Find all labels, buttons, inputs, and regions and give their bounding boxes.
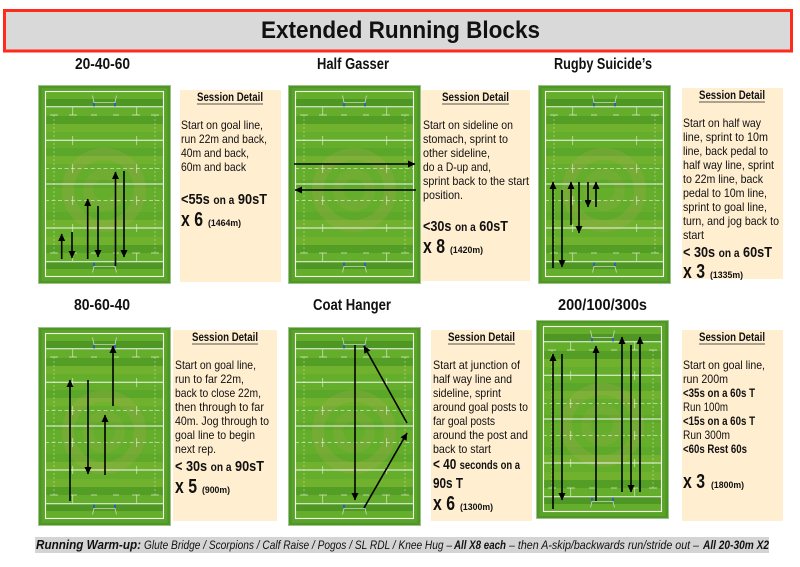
session detail card: sideline, sprint bbox=[433, 386, 502, 400]
footer: running warm-up: All X8 each bbox=[453, 538, 506, 552]
session detail card: (1335m) bbox=[710, 270, 743, 280]
session detail card: back to close 22m, bbox=[175, 386, 261, 400]
session detail card bbox=[421, 90, 530, 281]
session detail card: (900m) bbox=[202, 485, 230, 495]
session detail card: half way line, sprint bbox=[683, 158, 775, 172]
title banner bbox=[4, 10, 792, 51]
session detail card: < 30s on a 90sT bbox=[175, 458, 264, 475]
pitch diagram with arrows bbox=[38, 327, 171, 526]
session detail card bbox=[682, 88, 783, 283]
session detail card: (1420m) bbox=[450, 245, 483, 255]
session detail card: Session Detail bbox=[442, 90, 509, 104]
session detail card: Run 300m bbox=[683, 428, 730, 442]
session detail card: x 8 bbox=[423, 236, 445, 258]
session detail card: Run 100m bbox=[683, 400, 728, 414]
session detail card bbox=[180, 90, 281, 282]
session detail card: Session Detail bbox=[448, 330, 515, 344]
session detail card: then through to far bbox=[175, 400, 264, 414]
session detail card: stomach, sprint to bbox=[423, 132, 508, 146]
session detail card: Start on half way bbox=[683, 116, 761, 130]
panel: 80-60-40 bbox=[38, 297, 277, 526]
session detail card: around the post and bbox=[433, 428, 528, 442]
session detail card: other sideline, bbox=[423, 146, 490, 160]
session detail card: run 22m and back, bbox=[181, 132, 267, 146]
session detail card: <15s on a 60s T bbox=[683, 414, 756, 428]
panel: 20-40-60 bbox=[38, 56, 281, 284]
session detail card: line, sprint to 10m bbox=[683, 130, 768, 144]
session detail card: x 6 bbox=[433, 493, 455, 515]
session detail card: sprint to goal line, bbox=[683, 200, 767, 214]
footer: running warm-up: Glute Bridge / Scorpions / Calf Raise / Pogos / SL RDL / Knee Hug – bbox=[144, 538, 452, 552]
session detail card: 60m and back bbox=[181, 160, 247, 174]
heading: Half Gasser bbox=[317, 56, 389, 73]
session detail card: <30s on a 60sT bbox=[423, 218, 508, 235]
session detail card: <35s on a 60s T bbox=[683, 386, 756, 400]
panel: Rugby Suicide's bbox=[538, 56, 783, 284]
session detail card: Session Detail bbox=[192, 330, 258, 344]
session detail card: far goal posts bbox=[433, 414, 495, 428]
session detail card: < 30s on a 60sT bbox=[683, 244, 772, 261]
title banner: Extended Running Blocks bbox=[261, 17, 540, 44]
session detail card: sprint back to the start bbox=[423, 174, 530, 188]
session detail card: next rep. bbox=[175, 442, 216, 456]
session detail card: half way line and bbox=[433, 372, 512, 386]
pitch diagram with arrows bbox=[288, 85, 421, 284]
pitch diagram with arrows bbox=[538, 85, 671, 284]
session detail card: <55s on a 90sT bbox=[181, 191, 267, 208]
session detail card bbox=[682, 330, 783, 521]
session detail card: back to start bbox=[433, 442, 492, 456]
session detail card: Start at junction of bbox=[433, 358, 521, 372]
session detail card: < 40 seconds on a bbox=[433, 456, 520, 473]
footer: running warm-up bbox=[35, 537, 769, 553]
session detail card: x 6 bbox=[181, 209, 203, 231]
pitch diagram with arrows bbox=[38, 85, 171, 284]
session detail card: run 200m bbox=[683, 372, 728, 386]
session detail card: Start on goal line, bbox=[181, 118, 263, 132]
session detail card: around goal posts to bbox=[433, 400, 528, 414]
session detail card: run to far 22m, bbox=[175, 372, 244, 386]
session detail card: to 22m line, back bbox=[683, 172, 764, 186]
panel: Coat Hanger bbox=[288, 297, 532, 526]
session detail card: 90s T bbox=[433, 475, 463, 492]
session detail card bbox=[431, 330, 532, 521]
session detail card: do a D-up and, bbox=[423, 160, 491, 174]
session detail card: Session Detail bbox=[197, 90, 263, 104]
session detail card: x 3 bbox=[683, 471, 705, 493]
session detail card: 40m and back, bbox=[181, 146, 249, 160]
session detail card bbox=[173, 330, 277, 521]
session detail card: x 5 bbox=[175, 476, 197, 498]
session detail card: line, back pedal to bbox=[683, 144, 768, 158]
heading: Rugby Suicide’s bbox=[554, 56, 652, 73]
session detail card: Session Detail bbox=[699, 88, 765, 102]
footer: running warm-up: Running Warm-up: bbox=[36, 537, 141, 552]
session detail card: Start on goal line, bbox=[175, 358, 256, 372]
session detail card: (1800m) bbox=[711, 480, 744, 490]
pitch diagram with arrows bbox=[536, 320, 669, 519]
footer: running warm-up: All 20-30m X2 bbox=[702, 538, 769, 552]
session detail card: goal line to begin bbox=[175, 428, 255, 442]
footer: running warm-up: – then A-skip/backwards run/stride out – bbox=[508, 538, 699, 552]
session detail card: 40m. Jog through to bbox=[175, 414, 269, 428]
heading: 200/100/300s bbox=[558, 297, 647, 314]
session detail card: pedal to 10m line, bbox=[683, 186, 767, 200]
session detail card: x 3 bbox=[683, 261, 705, 283]
heading: Coat Hanger bbox=[313, 297, 391, 314]
heading: 20-40-60 bbox=[75, 56, 130, 73]
session detail card: position. bbox=[423, 188, 463, 202]
heading: 80-60-40 bbox=[74, 297, 130, 314]
pitch diagram with arrows bbox=[288, 327, 421, 526]
session detail card: (1300m) bbox=[460, 502, 493, 512]
session detail card: Start on goal line, bbox=[683, 358, 765, 372]
session detail card: <60s Rest 60s bbox=[683, 442, 747, 456]
panel: 200/100/300s bbox=[536, 297, 783, 521]
session detail card: turn, and jog back to bbox=[683, 214, 779, 228]
session detail card: Session Detail bbox=[699, 330, 765, 344]
session detail card: Start on sideline on bbox=[423, 118, 513, 132]
session detail card: start bbox=[683, 228, 705, 242]
panel: Half Gasser bbox=[288, 56, 530, 284]
session detail card: (1464m) bbox=[208, 218, 241, 228]
